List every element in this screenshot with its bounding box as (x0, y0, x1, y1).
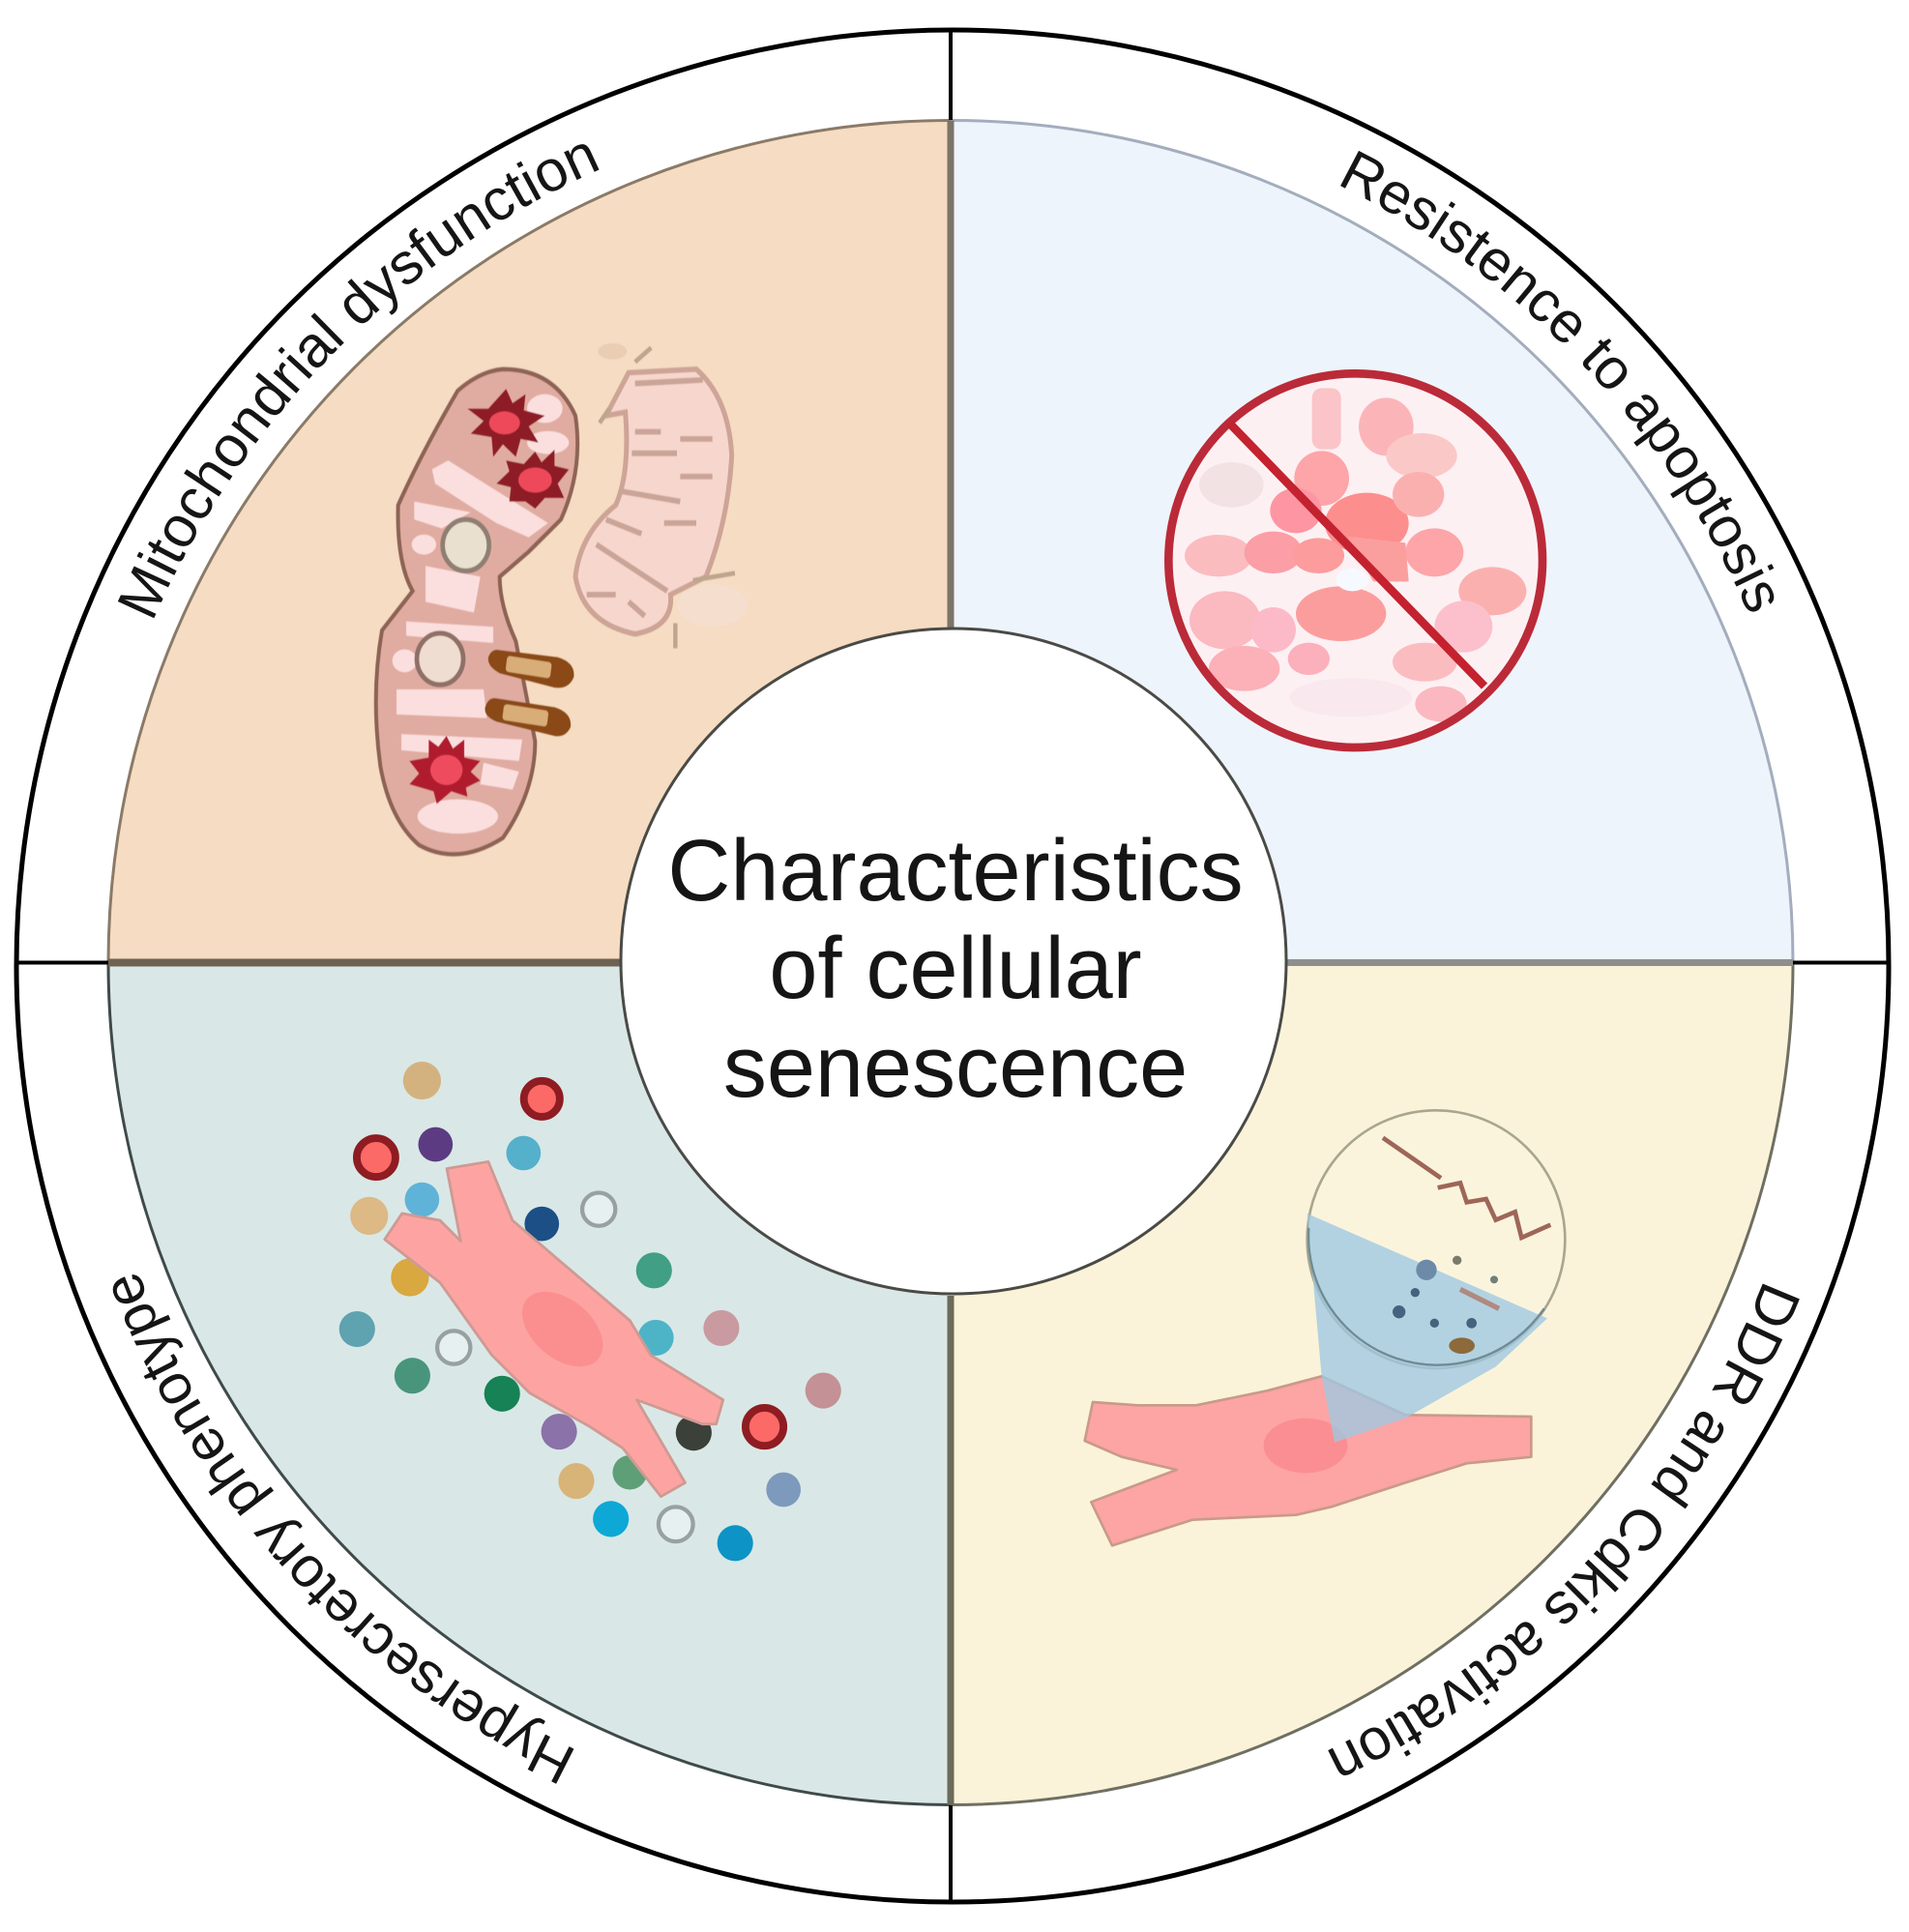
panel: mitochondrial dysfunction (108, 120, 951, 963)
icon: DDR cell with magnifier (1085, 1110, 1565, 1545)
secreted factors (339, 1062, 841, 1561)
ROS burst one (467, 389, 544, 456)
magnifier lens (1307, 1110, 1565, 1368)
red-ring factors (357, 1081, 783, 1446)
nucleus (1264, 1419, 1347, 1473)
panel: resistance to apoptosis (951, 120, 1793, 963)
panel: DDR and Cdkis activation (951, 963, 1793, 1804)
prohibition disc (1168, 373, 1542, 747)
hollow factors (437, 1193, 693, 1541)
cell nucleus (508, 1276, 617, 1382)
prohibition ring (1168, 373, 1542, 747)
quadrant dividers (108, 120, 1793, 1804)
ROS burst two (496, 450, 569, 509)
DNA strand (1383, 1138, 1550, 1238)
apoptotic centre gap (1336, 569, 1368, 591)
title (667, 823, 1244, 1116)
icon: mitochondria (376, 343, 748, 854)
cristae compartments (393, 395, 569, 834)
damaged vesicle two (417, 633, 463, 685)
label: Hypersecretory phenotype: Hypersecretory phenotype (112, 1274, 574, 1784)
panel outline arc: hypersecretory (108, 963, 951, 1804)
label: Resistence to apoptosis: Resistence to apoptosis (1340, 151, 1774, 612)
icon: main mitochondrion (376, 369, 577, 854)
panel: hypersecretory phenotype (108, 963, 951, 1804)
icon: hypersecretory cell (339, 1062, 841, 1561)
icon: apoptosis prohibited (1168, 373, 1542, 747)
prohibition slash (1230, 424, 1484, 687)
title: senescence (723, 1019, 1188, 1116)
lens lower rim (1308, 1228, 1544, 1365)
ATP capsule two (485, 698, 571, 736)
icon: faded mitochondrion (575, 343, 748, 648)
panel outline arc: DDR (951, 963, 1793, 1804)
title: of cellular (769, 921, 1142, 1017)
panel outline arc: mitochondrial (108, 120, 951, 963)
title: Characteristics (667, 823, 1244, 920)
ATP capsule one (488, 650, 573, 688)
pathway nodes (1393, 1256, 1499, 1329)
magnifying cone (1307, 1214, 1547, 1443)
fibroblast cell (1085, 1376, 1531, 1545)
label: Mitochondrial dysfunction: Mitochondrial dysfunction (118, 144, 600, 619)
senescent cell (385, 1161, 723, 1497)
centre circle (621, 629, 1286, 1294)
panel outline arc: apoptosis (951, 120, 1793, 963)
cell cluster (1185, 388, 1526, 721)
ROS burst three (409, 736, 481, 804)
CDK marker (1449, 1337, 1475, 1354)
damaged vesicle one (443, 519, 489, 571)
label: DDR and Cdkis activation: DDR and Cdkis activation (1328, 1284, 1800, 1775)
